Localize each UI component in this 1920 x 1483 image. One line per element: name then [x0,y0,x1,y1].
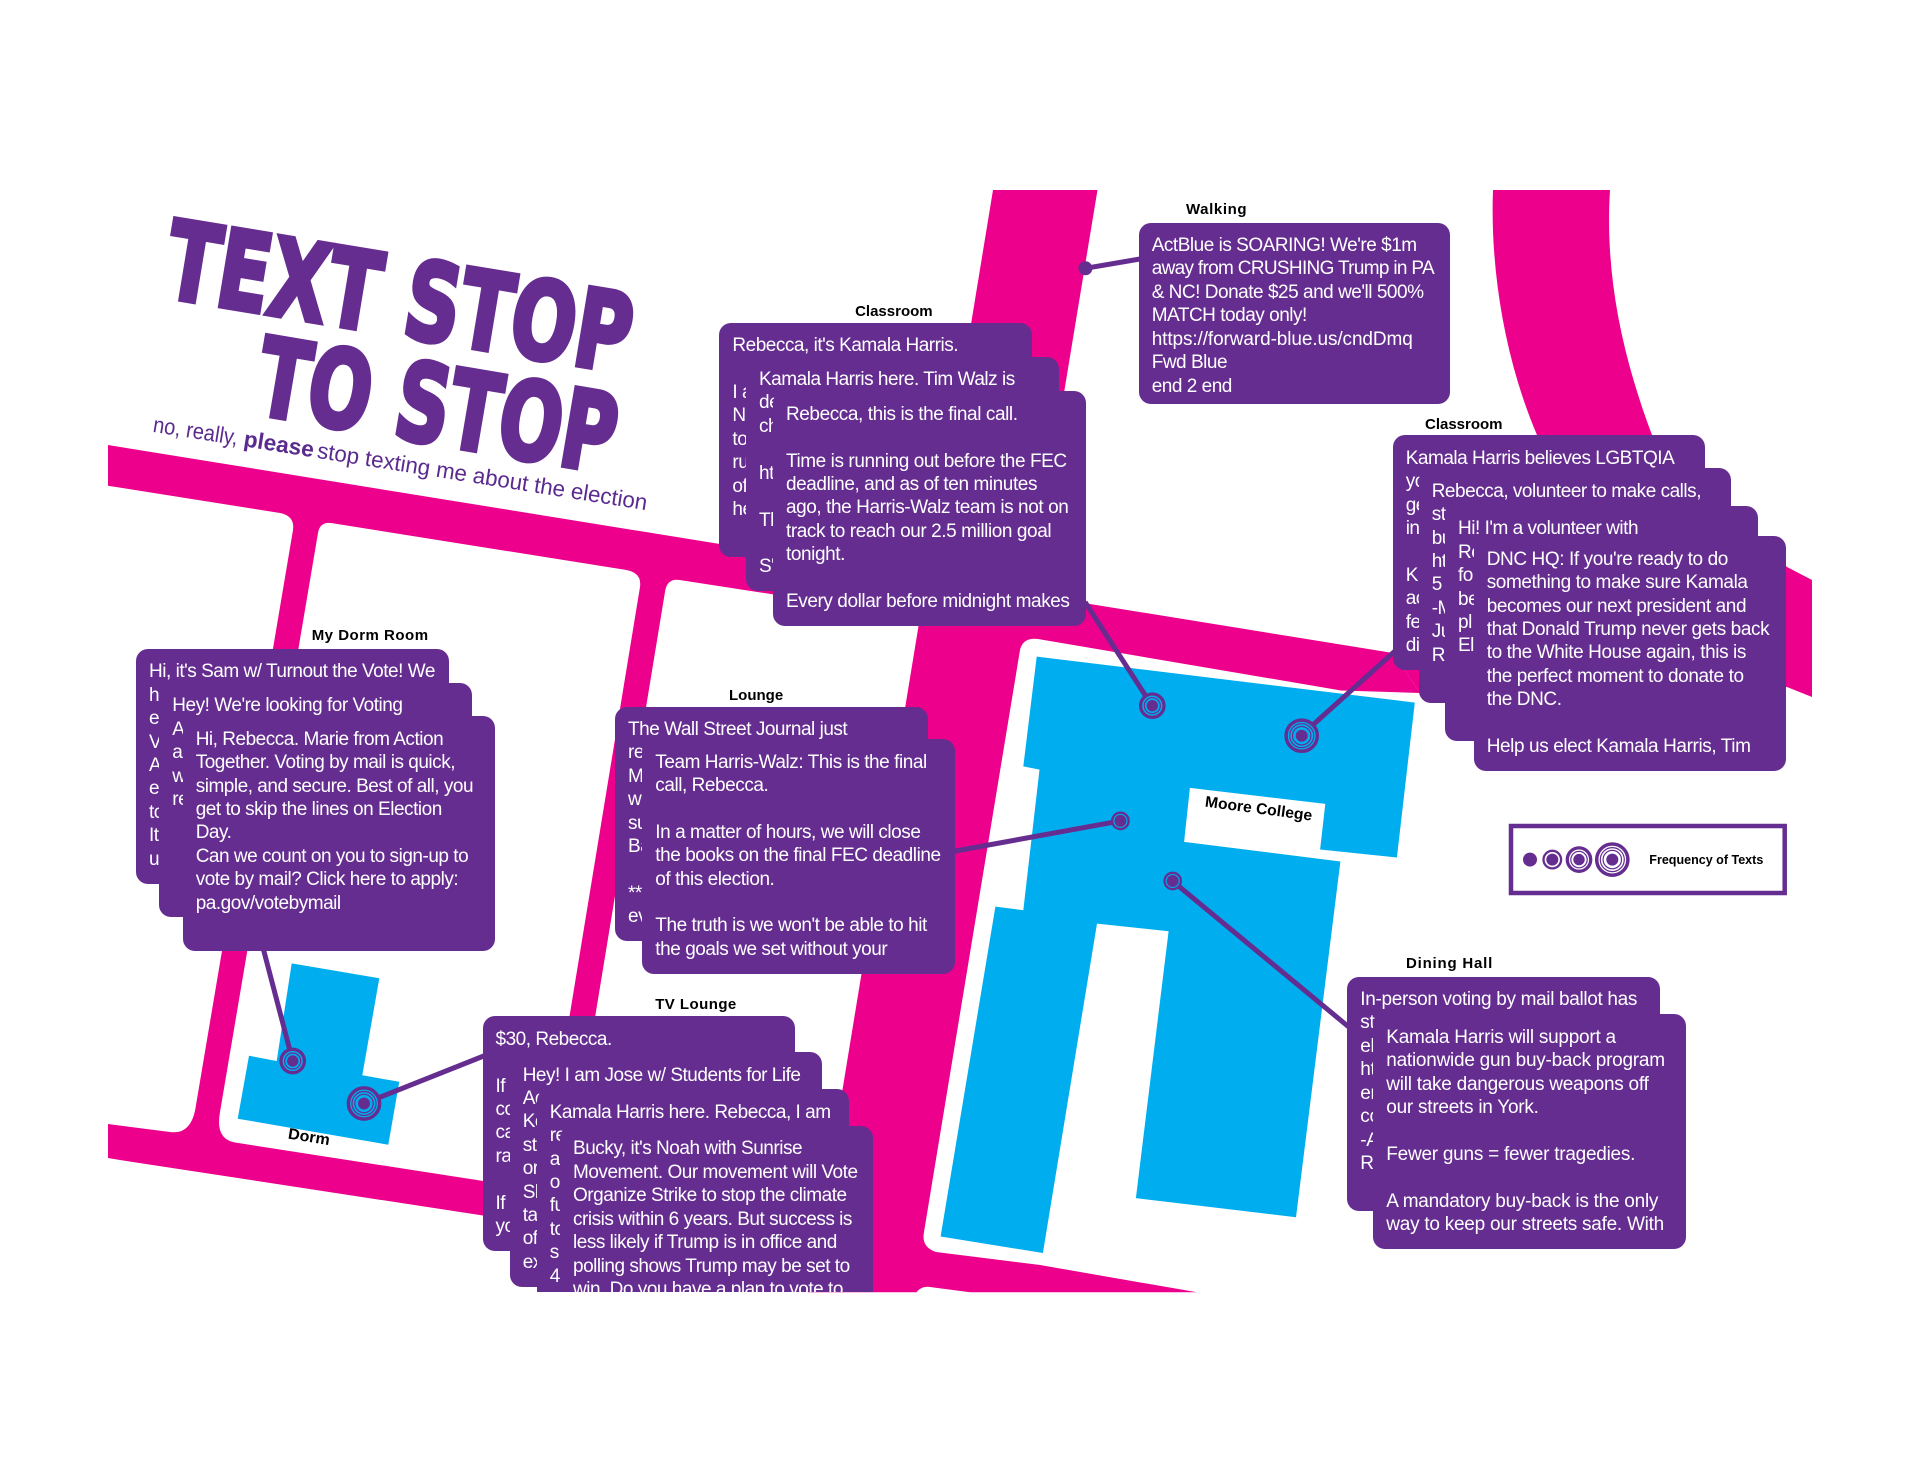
message bubble 1: fe [1406,612,1421,633]
message bubble 1: su [628,813,647,834]
icon: lounge frequency ring [1112,813,1129,829]
message bubble 1: If [496,1076,505,1096]
message bubble 2: call, Rebecca. [655,775,768,796]
panel: TV Lounge text messages [483,996,873,1292]
message bubble 1: st [1360,1012,1374,1033]
message bubble 2: A mandatory buy-back is the only [1386,1191,1658,1212]
message bubble 1: en [1360,1083,1381,1104]
message bubble 3: 4 [550,1266,560,1287]
label: Moore College: Moore College [1204,794,1314,825]
message bubble 3: vote by mail? Click here to apply: [196,869,458,890]
message bubble 1: re [628,742,644,763]
message bubble 3: to [550,1219,565,1240]
message bubble 2 [746,357,1059,591]
message bubble 3: Hi! I'm a volunteer with [1458,518,1638,539]
message bubble 1: It [149,825,159,846]
message bubble 2: Ac [523,1088,544,1109]
message bubble 1: K [1406,565,1418,586]
message bubble 4 [560,1126,873,1361]
message bubble 1 [1347,977,1660,1211]
message bubble: & NC! Donate $25 and we'll 500% [1152,282,1424,303]
message bubble 1: e [149,778,159,799]
message bubble 3: Re [1458,542,1481,563]
message bubble 1: If [496,1193,505,1214]
message bubble 4: to the White House again, this is [1487,642,1746,663]
message bubble 3: ago, the Harris-Walz team is not on [786,497,1068,518]
message bubble 4: Movement. Our movement will Vote [573,1162,858,1183]
heading: Walking: Walking [1186,201,1247,218]
message bubble 4 [1474,536,1786,771]
message bubble 1: w [628,789,641,810]
message bubble 1: R [1360,1153,1374,1174]
panel: Dining Hall text messages [1347,955,1686,1249]
message bubble 2 [1419,468,1731,703]
road network [108,190,1812,1293]
message bubble 2: or [523,1158,539,1179]
panel: Classroom text messages, centre [719,303,1086,626]
message bubble 3: simple, and secure. Best of all, you [196,776,473,796]
message bubble 3: deadline, and as of ten minutes [786,474,1037,495]
message bubble 1: of [732,476,747,497]
title: TO STOP [249,315,626,499]
message bubble 3: pa.gov/votebymail [196,893,341,914]
message bubble 1: N [732,405,746,426]
message bubble 3: re [550,1125,566,1146]
message bubble 1: $30, Rebecca. [496,1029,612,1050]
message bubble 2: de [759,392,779,413]
message bubble 2: of this election. [655,869,774,890]
heading: Lounge: Lounge [729,686,783,704]
message bubble 1: di [1406,635,1420,656]
message bubble 2: ht [759,463,774,484]
message bubble 3: a [550,1149,560,1170]
message bubble 4: Organize Strike to stop the climate [573,1185,847,1206]
icon: classroom frequency ring [1141,694,1164,717]
message bubble 2: Ju [1432,621,1451,642]
icon: dorm room frequency ring [281,1049,304,1073]
message bubble 1 [136,649,449,884]
message bubble 1 [482,1016,795,1251]
message bubble 1 [1393,435,1705,670]
message bubble 3: fo [1458,565,1473,586]
message bubble 2 [510,1052,822,1287]
message bubble 1: ht [1360,1059,1375,1080]
message bubble 1: e [149,708,159,729]
message bubble 1: to [149,802,164,823]
message bubble 3: Every dollar before midnight makes [786,591,1070,612]
subtitle: please [242,426,316,462]
message bubble 3: Can we count on you to sign-up to [196,846,468,867]
message bubble 1: yo [496,1216,515,1237]
message bubble 3 [1445,506,1758,741]
message bubble 1: ge [1406,494,1426,516]
message bubble 1: h [149,685,159,706]
message bubble 4: the perfect moment to donate to [1487,666,1744,687]
message bubble 4: polling shows Trump may be set to [573,1256,850,1277]
message bubble 3: Day. [196,822,231,843]
message bubble 4: crisis within 6 years. But success is [573,1209,852,1230]
message bubble: ActBlue is SOARING! We're $1m [1152,235,1417,256]
panel: Classroom text messages, right [1393,416,1786,771]
message bubble 1: A [149,755,161,776]
message bubble 1: ra [496,1146,511,1167]
icon: walking location dot [1078,261,1092,275]
message bubble: end 2 end [1152,376,1232,397]
message bubble 2: The truth is we won't be able to hit [655,915,927,936]
building: Moore College [941,657,1415,1253]
message bubble: https://forward-blue.us/cndDmq [1152,329,1413,350]
message bubble 4: that Donald Trump never gets back [1487,619,1769,640]
message bubble 1: In-person voting by mail ballot has [1360,989,1637,1010]
message bubble 1: ev [628,906,647,927]
message bubble 2: st [523,1135,537,1156]
message bubble 2: a [172,742,182,763]
message bubble 3: tonight. [786,544,845,565]
icon: second classroom frequency ring [1286,720,1317,751]
message bubble 1: Hi, it's Sam w/ Turnout the Vote! We [149,661,435,682]
message bubble 2: Hey! We're looking for Voting [172,695,402,716]
message bubble 2: A [172,719,184,740]
message bubble 2: Fewer guns = fewer tragedies. [1386,1144,1635,1165]
message bubble: away from CRUSHING Trump in PA [1152,258,1434,279]
subtitle [151,412,649,515]
message bubble 2: ex [523,1252,542,1273]
message bubble 3: Time is running out before the FEC [786,450,1067,472]
title [157,199,641,499]
message bubble 4: less likely if Trump is in office and [573,1232,837,1253]
message bubble 1: Rebecca, it's Kamala Harris. [732,335,958,356]
message bubble 4: Bucky, it's Noah with Sunrise [573,1138,802,1159]
subtitle: stop texting me about the election [316,438,649,515]
title: TEXT STOP [157,199,641,399]
message bubble 3 [183,716,495,951]
message bubble 3: s [550,1242,559,1263]
heading: Dining Hall: Dining Hall [1406,955,1493,972]
message bubble 4: the DNC. [1487,689,1562,710]
message bubble 2: bu [1432,528,1452,548]
message bubble 3: Rebecca, this is the final call. [786,404,1018,425]
heading: My Dorm Room: My Dorm Room [312,627,429,644]
subtitle: no, really, [151,412,240,450]
message bubble 1: co [1360,1106,1380,1127]
heading: Classroom: Classroom [1425,416,1503,433]
message bubble 1: Ba [628,836,650,857]
message bubble 1: Kamala Harris believes LGBTQIA [1406,448,1674,469]
message bubble 2 [159,683,472,917]
message bubble 2: w [172,766,186,786]
message bubble 1: ru [732,452,748,473]
message bubble 1: V [149,732,161,753]
message bubble 3 [537,1089,849,1324]
message bubble 2: ch [759,416,778,437]
panel: My Dorm Room text messages [136,627,495,951]
connector lines [262,259,1395,1104]
message bubble 2: the goals we set without your [655,939,887,960]
message bubble 1 [615,706,928,941]
message bubble 1: co [496,1099,515,1120]
message bubble 3: Together. Voting by mail is quick, [196,752,455,773]
message bubble 4: DNC HQ: If you're ready to do [1487,549,1728,570]
message bubble 3 [773,391,1086,626]
message bubble 2: Tl [759,510,774,531]
message bubble: Fwd Blue [1152,352,1227,373]
message bubble 1: in [1406,518,1420,539]
message bubble 1: M [628,766,643,787]
message bubble 1: ** [628,883,642,904]
message bubble 2: Ke [523,1111,545,1132]
message bubble 2: Kamala Harris will support a [1386,1027,1616,1048]
message bubble 2: our streets in York. [1386,1097,1539,1118]
message bubble 2: -M [1432,598,1453,619]
message bubble 2: 5 [1432,574,1442,595]
legend: frequency of texts: Frequency of Texts [1649,852,1763,867]
message bubble 4: something to make sure Kamala [1487,572,1748,593]
message bubble 2: Kamala Harris here. Tim Walz is [759,369,1015,390]
message bubble 2: S' [759,556,774,577]
message bubble 3: El [1458,635,1474,656]
message bubble 2: will take dangerous weapons off [1386,1074,1649,1094]
icon: TV lounge frequency ring [348,1088,380,1119]
message bubble 1: ac [1406,588,1425,609]
message bubble 3: fu [550,1195,565,1216]
message bubble 2: ht [1432,551,1447,572]
message bubble 3: be [1458,589,1478,610]
message bubble 1: he [732,499,753,520]
message bubble 2: R [1432,645,1445,666]
message bubble 1: to [732,429,747,450]
message bubble 2: of [523,1228,538,1249]
message bubble 3: get to skip the lines on Election [196,799,442,820]
message bubble: MATCH today only! [1152,305,1307,326]
message bubble 3: o [550,1172,560,1193]
message bubble 1: yo [1406,471,1425,492]
panel: Lounge text messages [615,686,955,974]
message bubble 3: pl [1458,612,1472,633]
legend: frequency of texts [1511,826,1785,893]
icon: dining hall frequency ring [1164,873,1181,889]
panel: Walking text message [1139,201,1450,404]
message bubble 2: ta [523,1205,538,1226]
message bubble 2: In a matter of hours, we will close [655,822,920,843]
message bubble 2: st [1432,504,1446,525]
message bubble 2: Team Harris-Walz: This is the final [655,752,927,773]
message bubble 2: Rebecca, volunteer to make calls, [1432,481,1701,502]
heading: Classroom: Classroom [855,303,933,320]
building: dorm [238,963,399,1145]
message bubble 1: I a [732,382,752,403]
message bubble 1: el [1360,1036,1374,1057]
message bubble 2: Sl [523,1182,539,1203]
message bubble 2: Hey! I am Jose w/ Students for Life [523,1065,801,1086]
message bubble 1: ca [496,1122,515,1143]
message bubble 1: -A [1360,1130,1379,1151]
message bubble 1: u [149,849,159,870]
message bubble [1139,223,1450,404]
message bubble 3: Hi, Rebecca. Marie from Action [196,729,443,750]
label: Dorm: Dorm [287,1126,331,1149]
message bubble 2 [1373,1014,1686,1249]
message bubble 4: Help us elect Kamala Harris, Tim [1487,736,1751,757]
message bubble 4: becomes our next president and [1487,596,1746,616]
heading: TV Lounge: TV Lounge [655,996,737,1012]
message bubble 2: the books on the final FEC deadline [655,845,941,866]
message bubble 1: The Wall Street Journal just [628,719,847,740]
message bubble 2: re [172,789,188,810]
message bubble 3: track to reach our 2.5 million goal [786,521,1051,542]
message bubble 3: Kamala Harris here. Rebecca, I am [550,1102,831,1123]
message bubble 2: nationwide gun buy-back program [1386,1050,1665,1071]
message bubble 2: way to keep our streets safe. With [1386,1214,1664,1235]
message bubble 1 [719,323,1032,557]
message bubble 2 [642,739,955,974]
